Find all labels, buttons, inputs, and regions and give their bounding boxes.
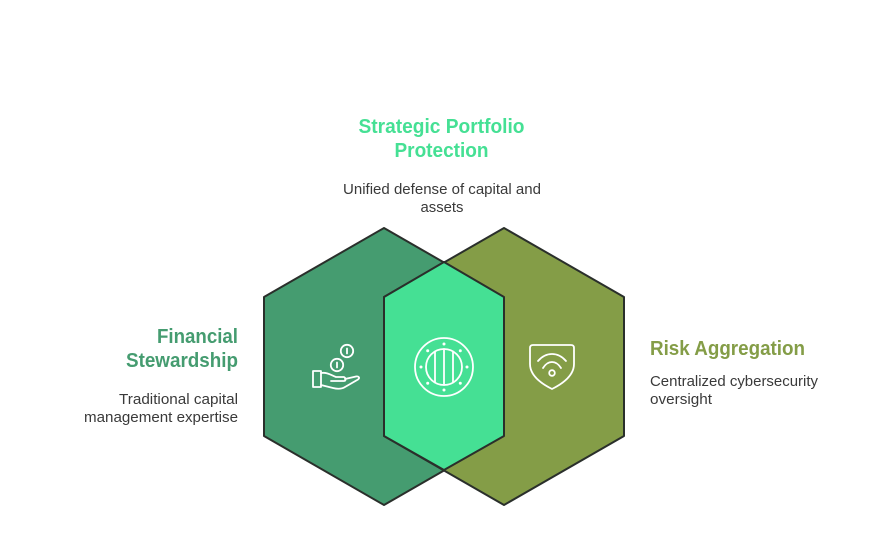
heading: risk aggregation: Risk Aggregation bbox=[650, 338, 805, 360]
heading: financial stewardship bbox=[126, 326, 238, 372]
icon: hand with coins bbox=[313, 345, 359, 389]
hexagon: risk aggregation bbox=[384, 228, 624, 505]
text: strategic portfolio description bbox=[343, 182, 541, 216]
heading: strategic portfolio protection: Protection bbox=[394, 140, 488, 162]
heading: financial stewardship: Financial bbox=[157, 326, 238, 348]
heading: financial stewardship: Stewardship bbox=[126, 350, 238, 372]
icon: vault door bbox=[415, 338, 473, 396]
hexagon: overlap, strategic portfolio protection bbox=[384, 262, 504, 470]
text: financial stewardship description: Traditional capital bbox=[119, 392, 238, 408]
text: strategic portfolio description: assets bbox=[420, 200, 464, 216]
text: strategic portfolio description: Unified defense of capital and bbox=[343, 182, 541, 198]
icon: shield with wifi signal bbox=[530, 345, 574, 389]
text: risk aggregation description bbox=[650, 374, 819, 408]
text: risk aggregation description: oversight bbox=[650, 392, 712, 408]
heading: strategic portfolio protection: Strategic Portfolio bbox=[358, 116, 524, 138]
text: financial stewardship description bbox=[84, 392, 238, 426]
text: risk aggregation description: Centralized cybersecurity bbox=[650, 374, 819, 390]
hexagon: financial stewardship bbox=[264, 228, 504, 505]
heading: strategic portfolio protection bbox=[358, 116, 524, 162]
text: financial stewardship description: management expertise bbox=[84, 410, 238, 426]
